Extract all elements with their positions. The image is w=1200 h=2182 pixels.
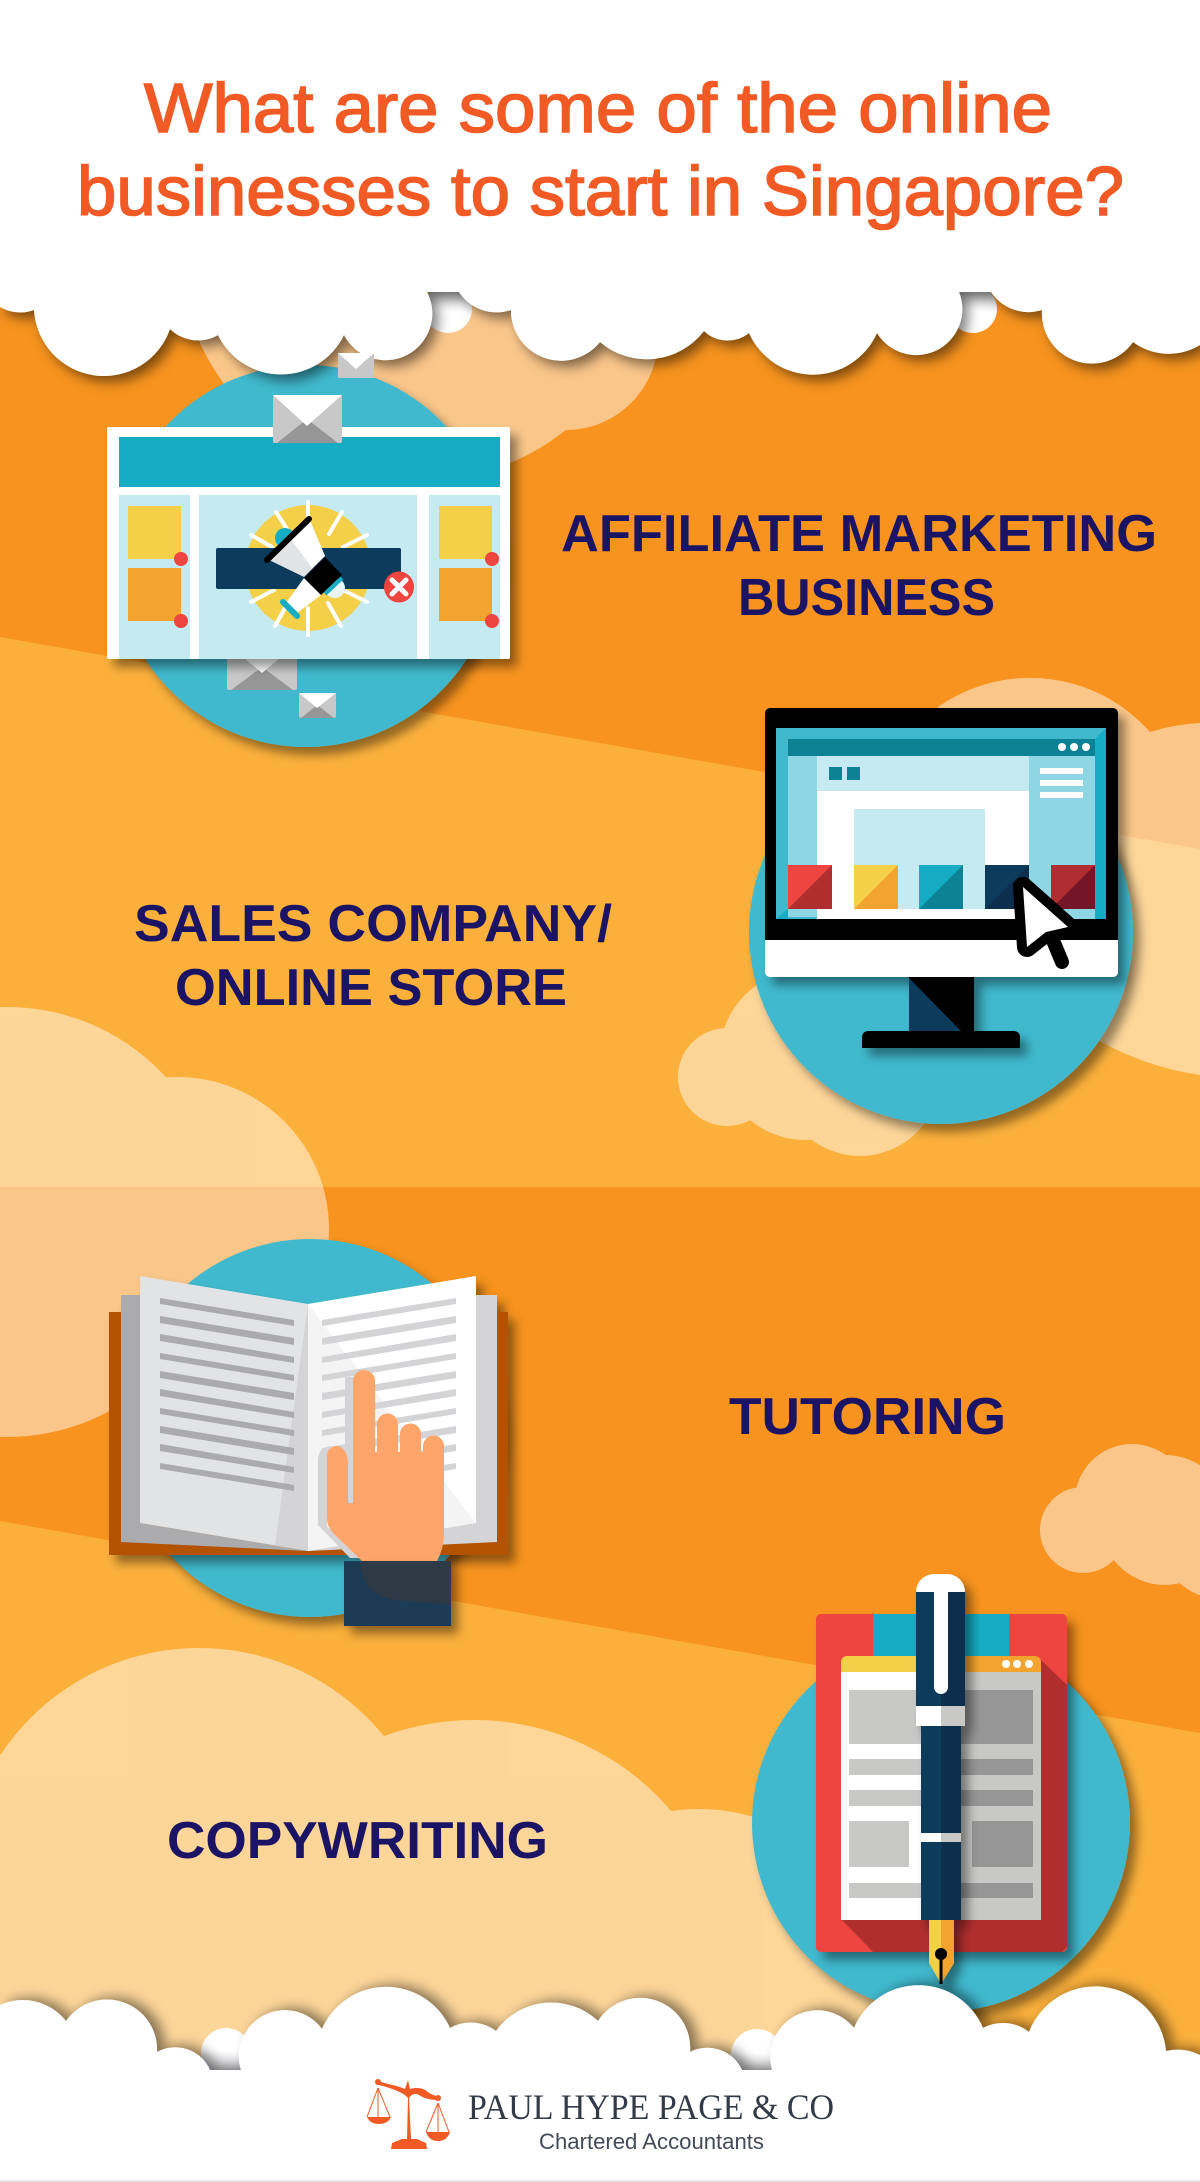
icon: open book <box>109 1276 508 1555</box>
icon: clipboard with document <box>816 1614 1067 1952</box>
heading: sales company / online store <box>134 895 612 1017</box>
product tiles <box>788 865 1095 909</box>
icon: small envelope at top <box>338 353 374 378</box>
icon: desktop monitor <box>765 708 1118 1048</box>
teal circle 3 <box>121 1239 499 1617</box>
logo: scales icon <box>367 2079 450 2149</box>
icon: web page window <box>107 427 510 659</box>
icon: megaphone <box>267 518 345 616</box>
heading: sales company / online store: SALES COMPANY/ <box>134 895 612 953</box>
icon: envelope small lower <box>299 693 336 718</box>
teal circle 1 <box>115 365 497 747</box>
heading: tutoring: TUTORING <box>729 1388 1006 1446</box>
logo: company name: Chartered Accountants <box>539 2129 764 2154</box>
logo: company name <box>468 2087 834 2154</box>
book text lines right <box>322 1298 456 1491</box>
icon: sun burst <box>245 502 371 635</box>
footer rule <box>0 2180 1200 2182</box>
heading: sales company / online store: ONLINE STORE <box>175 959 567 1017</box>
icon: fountain pen <box>916 1574 965 1984</box>
book text lines left <box>160 1298 294 1491</box>
panel: online store icon <box>749 708 1133 1124</box>
logo: company name: PAUL HYPE PAGE & CO <box>468 2087 834 2127</box>
title: What are some of the online <box>144 69 1052 147</box>
panel: tutoring icon <box>109 1239 508 1626</box>
icon: envelope on window <box>273 395 342 443</box>
document blocks <box>849 1690 941 1898</box>
teal circle 2 <box>749 740 1133 1124</box>
clouds: white bottom clouds <box>0 1985 1200 2182</box>
heading: affiliate marketing business: BUSINESS <box>738 569 995 627</box>
icon: pointing hand <box>327 1370 444 1561</box>
icon: mouse cursor <box>1023 887 1068 962</box>
icon: close badge <box>384 572 414 602</box>
title <box>77 69 1124 230</box>
icon: envelope lower left <box>227 642 297 690</box>
heading: affiliate marketing business <box>561 505 1157 627</box>
sleeve <box>344 1561 451 1626</box>
panel: copywriting icon <box>752 1574 1130 2012</box>
clouds: white top clouds <box>0 0 1200 376</box>
panel: affiliate marketing icon <box>107 365 510 747</box>
title: businesses to start in Singapore? <box>77 152 1124 230</box>
heading: copywriting: COPYWRITING <box>167 1812 548 1870</box>
dark banner <box>216 548 401 589</box>
heading: affiliate marketing business: AFFILIATE MARKETING <box>561 505 1157 563</box>
hand shadow <box>318 1377 365 1558</box>
teal circle 4 <box>752 1634 1130 2012</box>
